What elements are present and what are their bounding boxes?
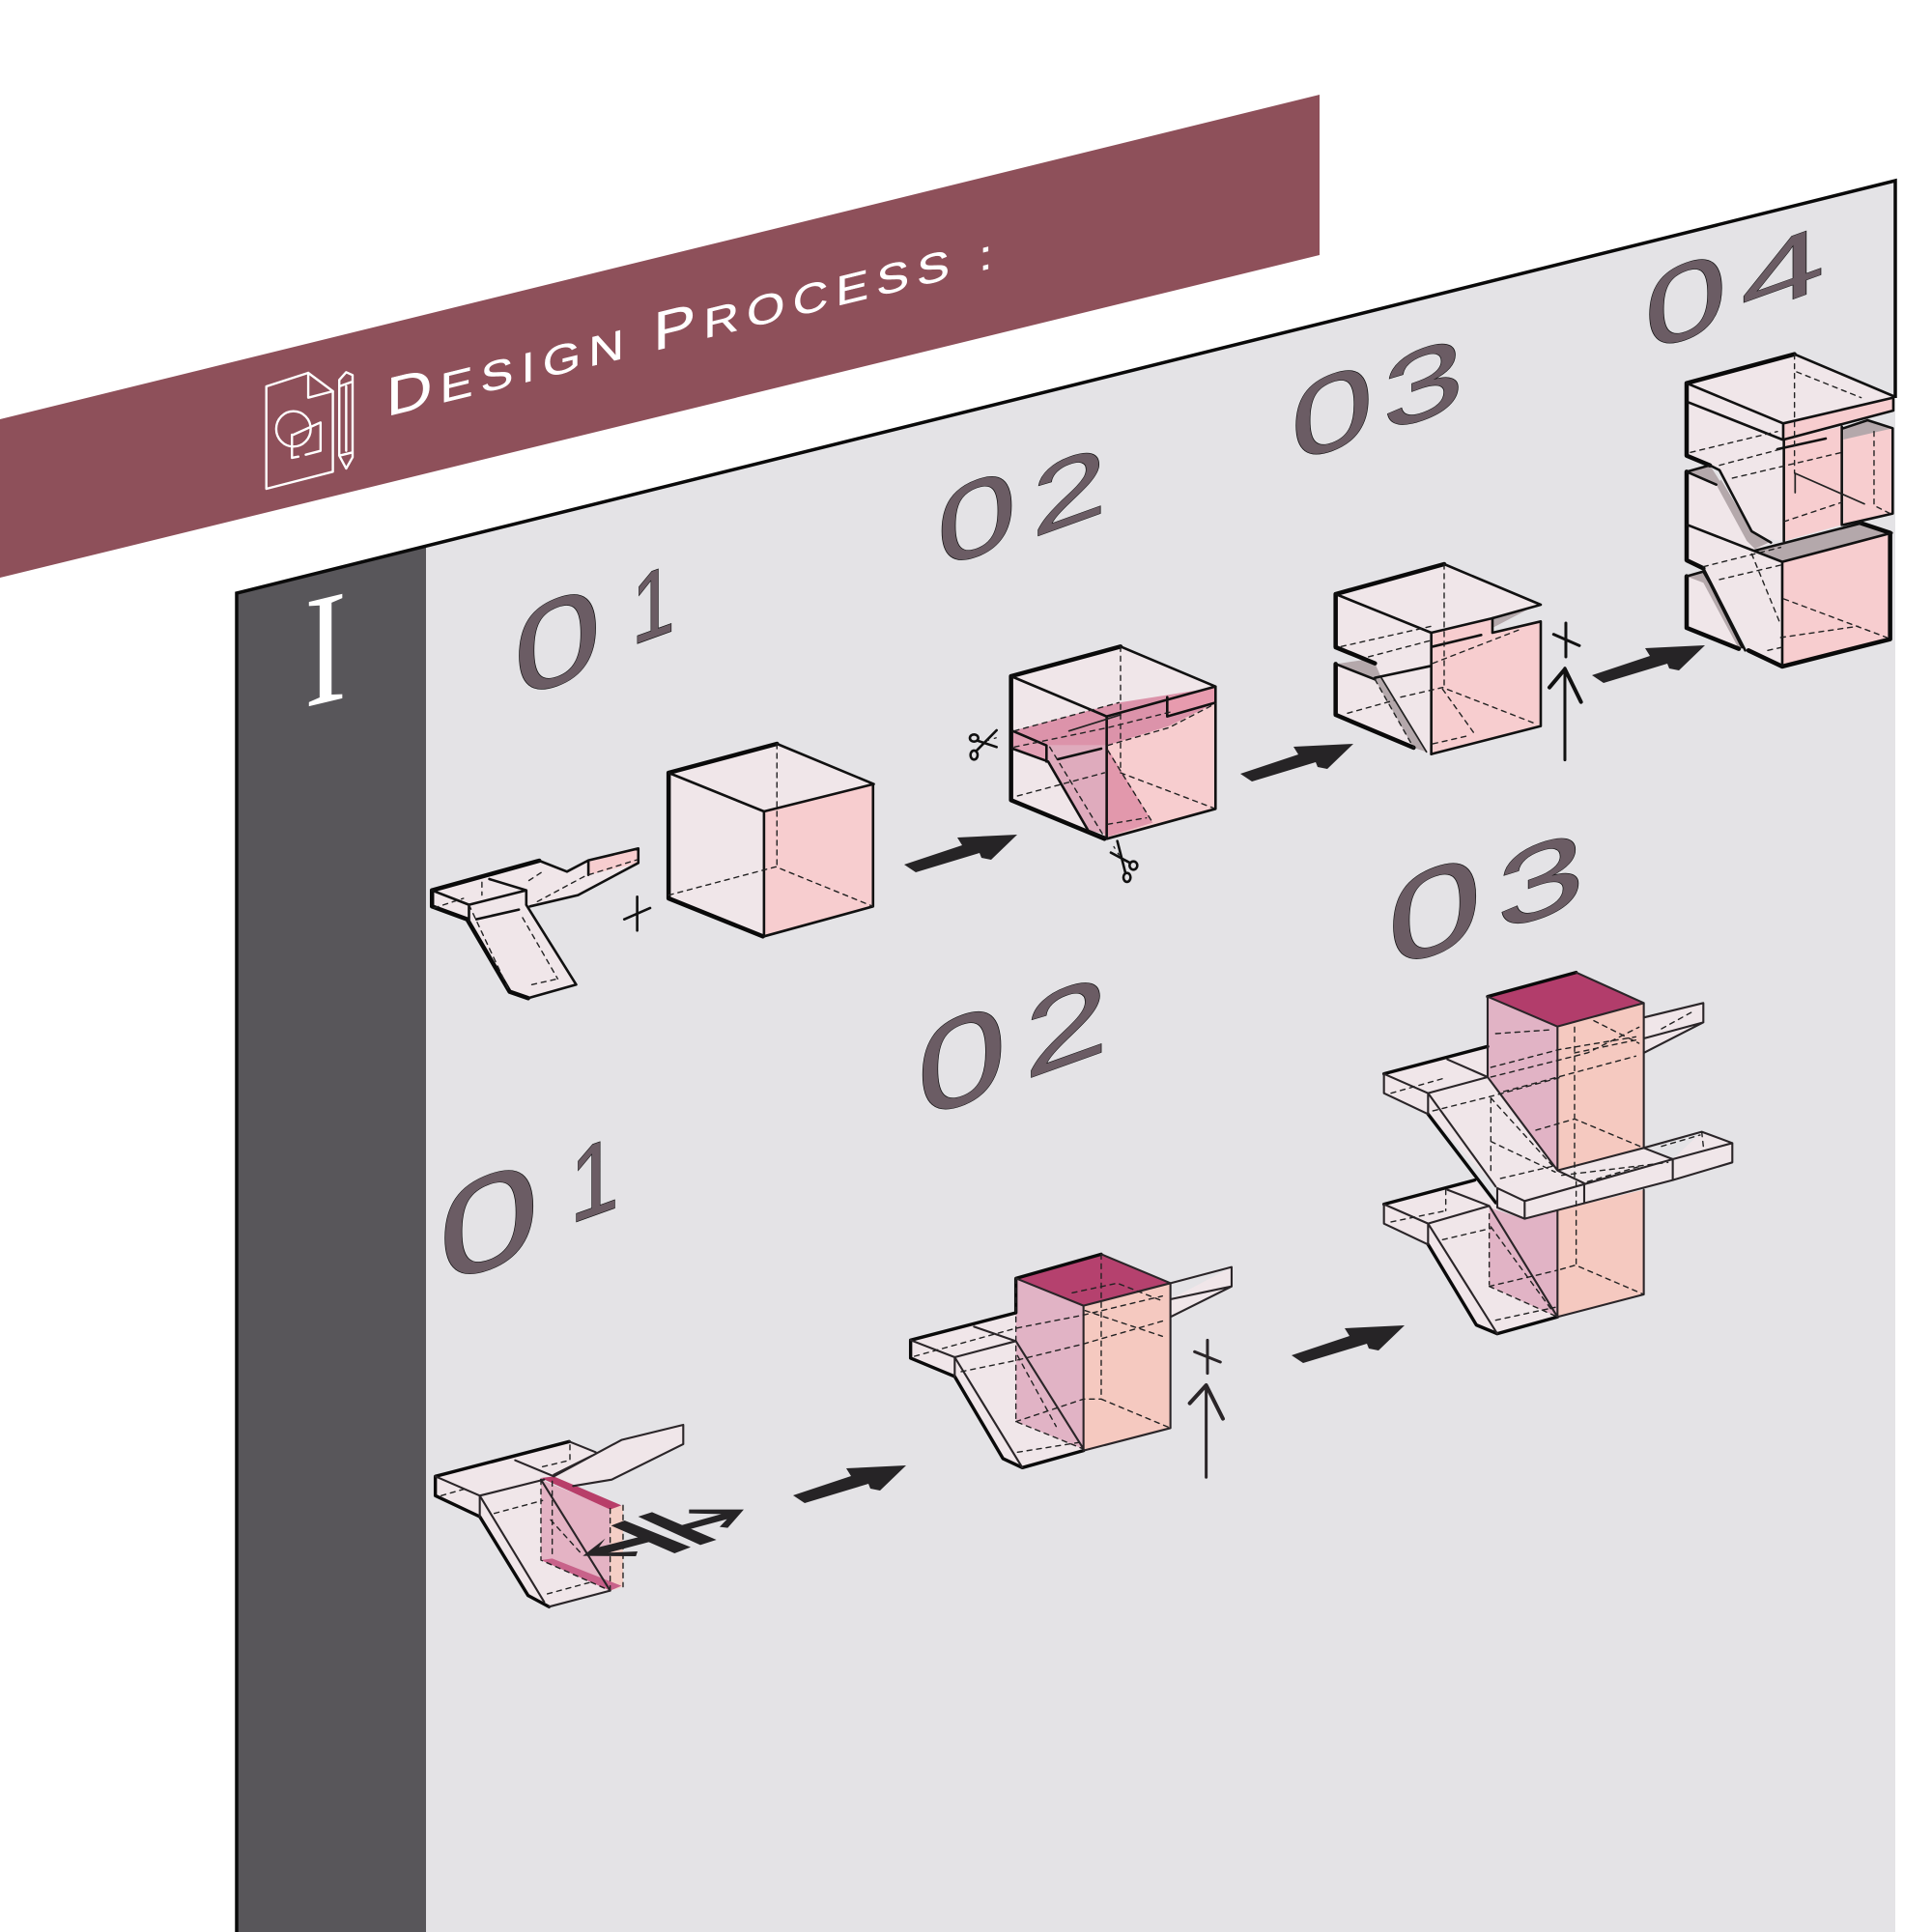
step number top 04: 4 (1741, 204, 1825, 337)
panel: process background (237, 181, 1895, 1932)
diagram: top step 3 carved cube (1336, 564, 1581, 760)
step number top 02: 0 (937, 444, 1016, 594)
cut band (1012, 688, 1215, 746)
side band (237, 547, 426, 1932)
step number bottom 01 (439, 1113, 619, 1316)
step number top 01: 1 (632, 542, 674, 667)
step number top 03 (1291, 313, 1464, 488)
section numeral: I (304, 554, 347, 742)
step number bottom 01: 1 (570, 1113, 619, 1246)
step number top 02 (937, 423, 1107, 594)
arrow (1592, 645, 1705, 683)
step number bottom 02: 2 (1024, 950, 1109, 1104)
step number bottom 03: 0 (1387, 826, 1482, 998)
lower slab and stair (1384, 1180, 1557, 1334)
diagram: bottom step 2 tower on staircase (911, 1254, 1232, 1477)
title text: DESIGN PROCESS : (386, 218, 1001, 429)
title banner (0, 95, 1320, 578)
step number bottom 02 (917, 950, 1109, 1149)
step number top 03: 3 (1382, 313, 1464, 455)
arrow (904, 835, 1017, 872)
arrow (793, 1465, 906, 1503)
plus and up arrow (1549, 623, 1581, 760)
icon: design file and pencil (267, 372, 353, 489)
staircase volume (432, 848, 639, 998)
middle walkway (1495, 1132, 1732, 1219)
icon: scissors bottom (1111, 841, 1137, 882)
inserted wall (541, 1476, 623, 1591)
step number top 02: 2 (1032, 423, 1107, 558)
arrow (1292, 1325, 1405, 1363)
step number bottom 03 (1387, 806, 1585, 998)
upper slab and stair (1384, 1046, 1557, 1186)
step number top 01 (514, 542, 674, 727)
step number bottom 01: 0 (439, 1129, 540, 1316)
step number bottom 02: 0 (917, 974, 1007, 1149)
diagram: bottom step 1 staircase with inserted wall (436, 1425, 744, 1606)
tower (1016, 1254, 1171, 1451)
arrow: equal sign double arrow (582, 1510, 744, 1556)
step number top 04: 0 (1644, 226, 1727, 377)
step number top 03: 0 (1291, 337, 1374, 488)
tower faces (1488, 973, 1644, 1317)
diagram: top step 4 stacked volumes (1687, 355, 1893, 667)
step number top 01: 0 (514, 557, 602, 727)
step number bottom 03: 3 (1496, 806, 1585, 956)
diagram: top step 2 cut cube (970, 646, 1215, 882)
diagram: top step 1 staircase and cube (432, 744, 874, 998)
icon: scissors left (970, 730, 1000, 759)
arrow (1240, 744, 1353, 781)
step number top 04 (1644, 204, 1825, 377)
plus sign (624, 896, 650, 930)
plus and up arrow (1190, 1340, 1223, 1477)
upper tail (1644, 1003, 1703, 1053)
diagram: bottom step 3 tower with two staircases (1384, 973, 1732, 1334)
cube (667, 744, 874, 936)
